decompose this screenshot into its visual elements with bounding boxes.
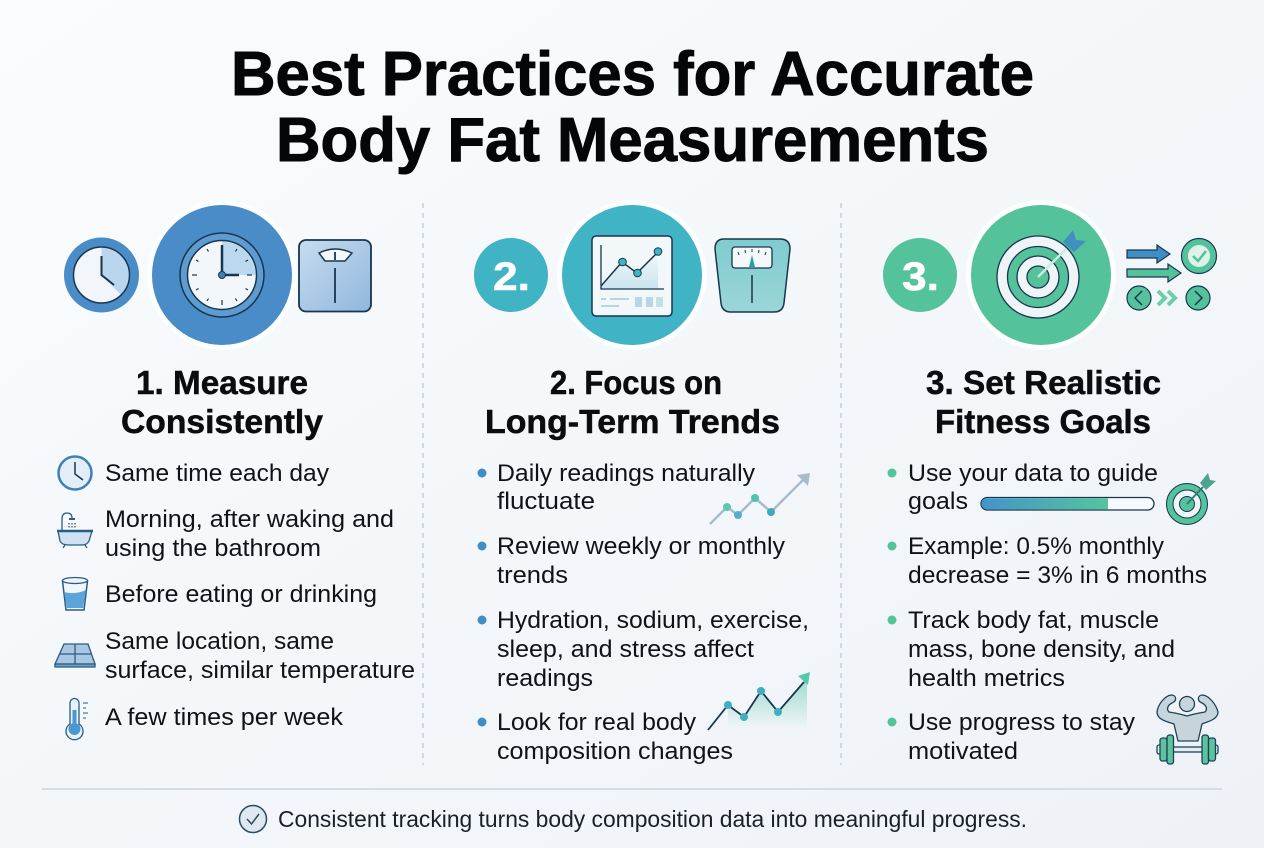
icon: number 3 badge [883,238,957,312]
bullet: hydration: sleep, and stress affect [497,636,754,663]
title [231,40,1034,175]
bullet: example [888,533,1207,589]
icon: line chart [557,200,707,350]
icon: small target [1166,473,1216,524]
item: same time: Same time each day [105,460,330,487]
icon: area trend [708,672,810,730]
bullet: fluctuate: Daily readings naturally [497,460,756,487]
icon: bathtub [57,513,93,548]
panel: long-term trends [474,200,810,765]
bullet: review: trends [497,562,568,589]
item: few times [66,698,344,740]
title: Best Practices for Accurate [231,40,1034,109]
heading: realistic goals: Fitness Goals [935,403,1151,440]
bullet: hydration [478,607,809,692]
item: before eating: Before eating or drinking [105,581,377,608]
heading: measure consistently: Consistently [121,403,324,440]
icon: number 2 badge [474,238,548,312]
icon: water glass [62,578,88,610]
heading: measure consistently [121,364,324,440]
bullet: track: Track body fat, muscle [908,607,1159,634]
bullet: real changes: Look for real body [497,709,697,736]
heading: long-term trends [485,364,780,440]
bullet: fluctuate: fluctuate [497,488,595,515]
heading: long-term trends: Long-Term Trends [485,403,780,440]
icon: floor tiles [55,644,95,667]
bullet: review [478,533,786,589]
bullet: data goals: goals [908,488,968,515]
heading: realistic goals: 3. Set Realistic [926,364,1161,401]
bullet: example: Example: 0.5% monthly [908,533,1165,560]
bullet: motivated: motivated [908,738,1018,765]
icon: bathroom scale [299,240,371,312]
item: same location: surface, similar temperature [105,657,415,684]
footer callout: Consistent tracking turns body composition data into meaningful progress. [278,806,1027,832]
item: few times: A few times per week [105,704,344,731]
panel: realistic goals [883,200,1218,765]
bullet: fluctuate [478,460,756,515]
item: same location [55,628,415,684]
panel: measure consistently [55,200,415,740]
icon: strong figure with dumbbell [1157,695,1218,764]
icon: check circle [240,806,266,832]
icon: teal scale [715,239,790,312]
icon: small clock [64,238,139,312]
bullet: motivated: Use progress to stay [908,709,1136,736]
title: Body Fat Measurements [276,106,989,175]
item: morning [57,506,394,562]
icon: target with arrow [966,200,1116,350]
bullet: track: health metrics [908,665,1065,692]
icon: rising trend [710,473,810,524]
bullet: data goals [888,460,1158,515]
item: same time [58,456,330,490]
bullet: example: decrease = 3% in 6 months [908,562,1207,589]
item: morning: using the bathroom [105,535,321,562]
bullet: motivated [888,709,1136,765]
heading: long-term trends: 2. Focus on [550,364,722,401]
icon: number 2 badge: 2. [493,255,530,299]
bullet: track [888,607,1175,692]
bullet: real changes [478,709,733,765]
bullet: review: Review weekly or monthly [497,533,786,560]
icon: clock [58,456,92,490]
icon: number 3 badge: 3. [902,255,939,299]
item: same location: Same location, same [105,628,334,655]
icon: large clock [147,200,297,350]
bullet: real changes: composition changes [497,738,733,765]
bullet: data goals: Use your data to guide [908,460,1158,487]
item: morning: Morning, after waking and [105,506,394,533]
bullet: hydration: Hydration, sodium, exercise, [497,607,809,634]
progress bar [981,498,1154,510]
bullet: hydration: readings [497,665,593,692]
icon: progress arrows [1127,238,1216,310]
heading: measure consistently: 1. Measure [136,364,308,401]
bullet: track: mass, bone density, and [908,636,1175,663]
icon: thermometer [66,698,88,740]
heading: realistic goals [926,364,1161,440]
